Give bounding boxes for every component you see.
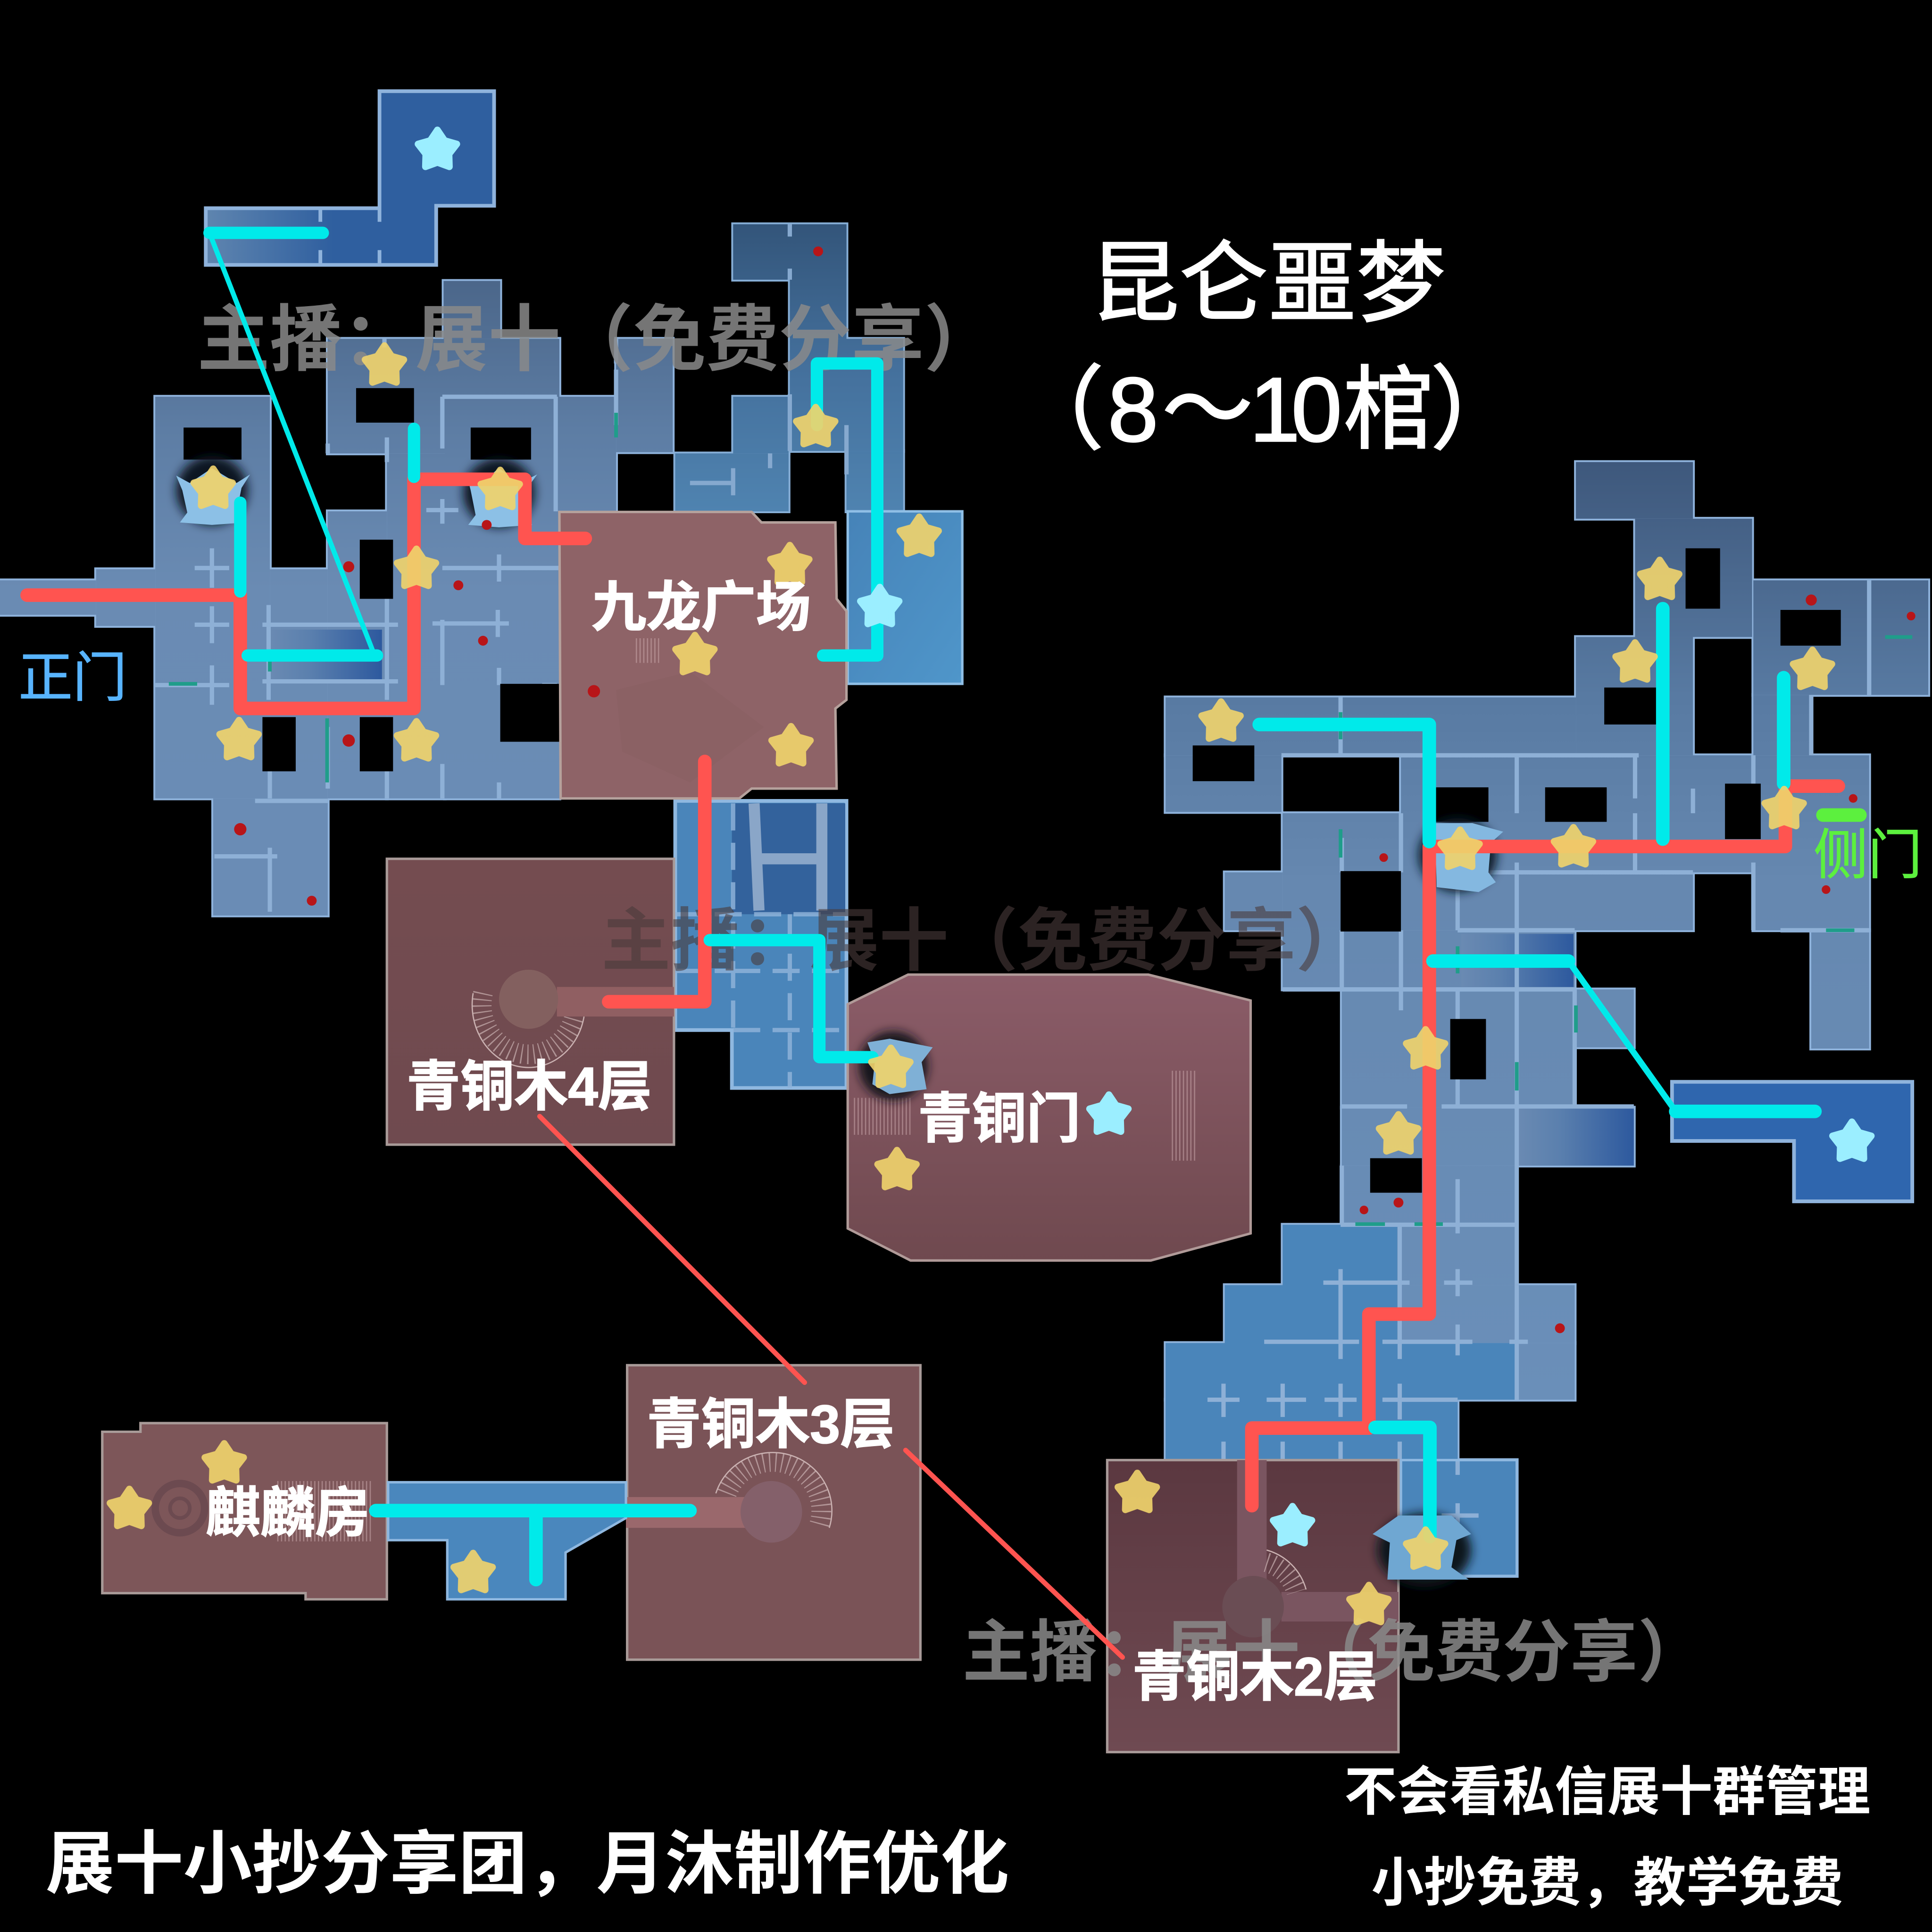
route: red main path [27,479,1838,1657]
watermark: centre: 主播：展十（免费分享） [601,902,1365,979]
footer: note line 1: 不会看私信展十群管理 [1344,1762,1870,1821]
labels: rooms [206,577,1377,1707]
labels: rooms: 青铜木3层 [647,1394,894,1455]
panel: right star room [1672,1082,1912,1201]
icons: green door bars [169,413,1912,1224]
panel: 青铜木3层 room [626,1365,920,1660]
labels: entrances: 正门 [18,648,127,708]
panel: left rooms complex [0,281,673,916]
labels: rooms: 青铜木2层 [1133,1647,1377,1707]
labels: rooms: 麒麟房 [206,1483,370,1543]
panel: bright blue star room [848,511,962,684]
panel: 青铜木2层 room [1107,1460,1399,1752]
labels: rooms: 青铜门 [918,1089,1081,1149]
watermark: top-left: 主播：展十（免费分享） [197,299,997,380]
watermark: bottom-right: 主播：展十（免费分享） [962,1615,1705,1690]
title: 昆仑噩梦 [1091,234,1445,333]
icons: door ornaments [176,456,1503,1587]
icons: green side door bar [1816,808,1867,822]
panel: 青铜门 room [848,974,1250,1260]
panel: top star room [206,91,494,265]
panel: blue rooms below plaza [675,801,847,1088]
footer: credit: 展十小抄分享团，月沐制作优化 [46,1825,1009,1902]
panel: blue corridor between 麒麟房 and 3层 [388,1482,626,1599]
footer: note line 2: 小抄免费，教学免费 [1371,1853,1843,1913]
labels: rooms: 九龙广场 [591,577,811,638]
icons: light blue stars [418,130,1871,1543]
panel: right rooms complex [1166,462,1928,1576]
labels: entrances: 侧门 [1814,825,1922,885]
title [1013,234,1522,460]
route: cyan secondary path [209,233,1815,1580]
title: （8～10棺） [1013,358,1522,460]
panel: 九龙广场 room [559,512,847,799]
holes [183,388,1841,1193]
labels: entrances [18,648,1922,885]
icons: red chests [234,246,1915,1333]
labels: rooms: 青铜木4层 [407,1057,652,1117]
panel: upper right corridor rooms [675,224,903,511]
panel: 青铜木4层 room [387,859,674,1145]
panel: 麒麟房 room [102,1423,387,1599]
icons: yellow stars [110,346,1832,1622]
